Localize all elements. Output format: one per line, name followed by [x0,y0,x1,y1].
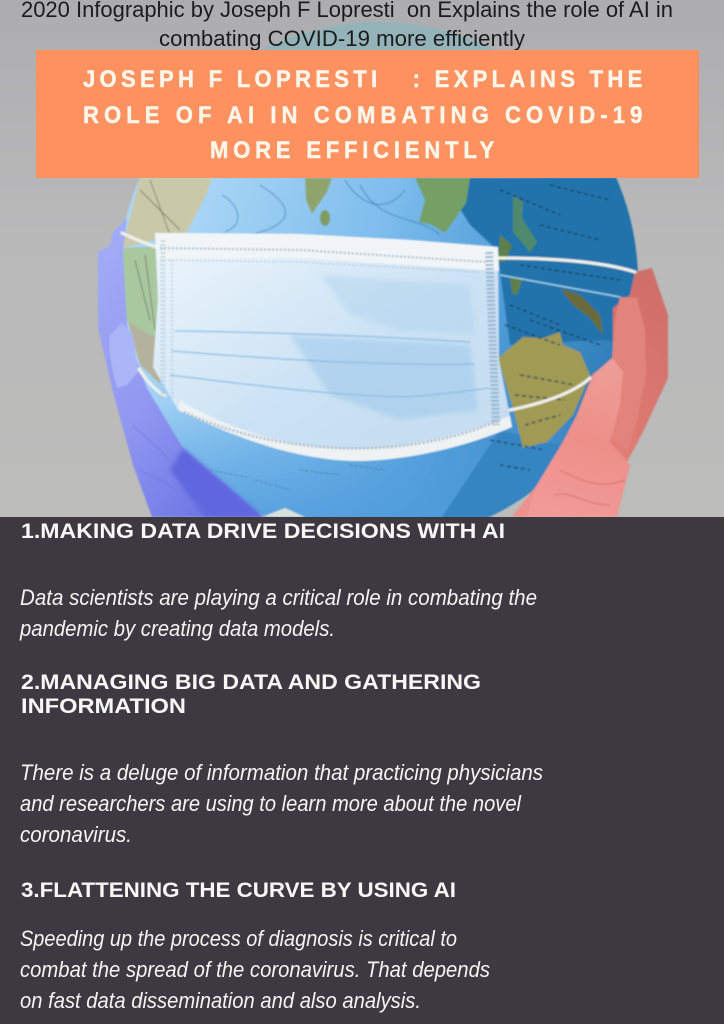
surgical mask [153,233,512,461]
section 2 body: coronavirus. [20,822,132,847]
continent: Indonesia [498,235,523,295]
caption above the banner [21,0,673,51]
section 2 body: There is a deluge of information that practicing physicians [20,760,543,785]
front finger [527,358,630,517]
globe lower shading [165,414,563,517]
mask bottom band [178,400,512,461]
banner title [83,65,642,163]
mask straps [122,233,635,410]
mask shading [320,275,475,335]
blue glove thumb [109,323,138,388]
section 2 body [20,760,543,847]
continent: Australia [498,332,590,448]
continent: Southeast Asia [415,178,470,233]
banner title: ROLE OF AI IN COMBATING COVID-19 [83,101,642,128]
banner title: MORE EFFICIENTLY [210,136,494,163]
section 2 heading: INFORMATION [21,694,186,718]
photo: globe wearing a mask, held by gloved hands [98,15,668,520]
globe [110,15,650,520]
section 1 body [19,585,537,641]
map detail marks [490,185,620,470]
map lines [134,180,440,490]
continent: India [305,178,332,214]
mask top band [155,233,499,271]
blue glove shadow [170,448,263,517]
section 3 body: Speeding up the process of diagnosis is critical to [20,926,457,951]
continent: Sri Lanka [320,210,330,226]
section 1 body: pandemic by creating data models. [19,616,335,641]
section 1 body: Data scientists are playing a critical role in combating the [20,585,537,610]
blue glove left hand [98,218,263,517]
thin reflection line [500,275,620,297]
mask pleats [170,331,490,397]
dark text panel [0,517,724,1024]
orange title banner [36,50,699,178]
section 3 body: combat the spread of the coronavirus. That depends [20,957,490,982]
section 2 heading [21,670,481,718]
section 1 heading: 1.MAKING DATA DRIVE DECISIONS WITH AI [21,519,505,543]
section 3 heading: 3.FLATTENING THE CURVE BY USING AI [21,878,456,902]
continent: Africa green [122,246,160,342]
continent: Africa south [128,322,160,384]
middle finger [612,297,646,450]
continent: Africa beige [122,178,212,248]
back finger [512,268,668,517]
continent: New Guinea [560,288,603,335]
continent: Philippines [513,195,537,252]
mask perforations [160,240,500,448]
globe lower right ocean [442,431,558,517]
section 2 heading: 2.MANAGING BIG DATA AND GATHERING [21,670,481,694]
globe top visible above banner [260,21,496,50]
background photo: gray backdrop [0,0,724,518]
Antarctic land fragment [262,508,305,517]
section 3 body: on fast data dissemination and also analysis. [20,988,421,1013]
section 2 body: and researchers are using to learn more about the novel [20,791,522,816]
banner title: JOSEPH F LOPRESTI : EXPLAINS THE [83,65,642,92]
globe upper right dark ocean [460,178,638,346]
caption above the banner: combating COVID-19 more efficiently [159,26,526,51]
pink glove right hand [512,268,668,517]
section 3 body [20,926,490,1013]
